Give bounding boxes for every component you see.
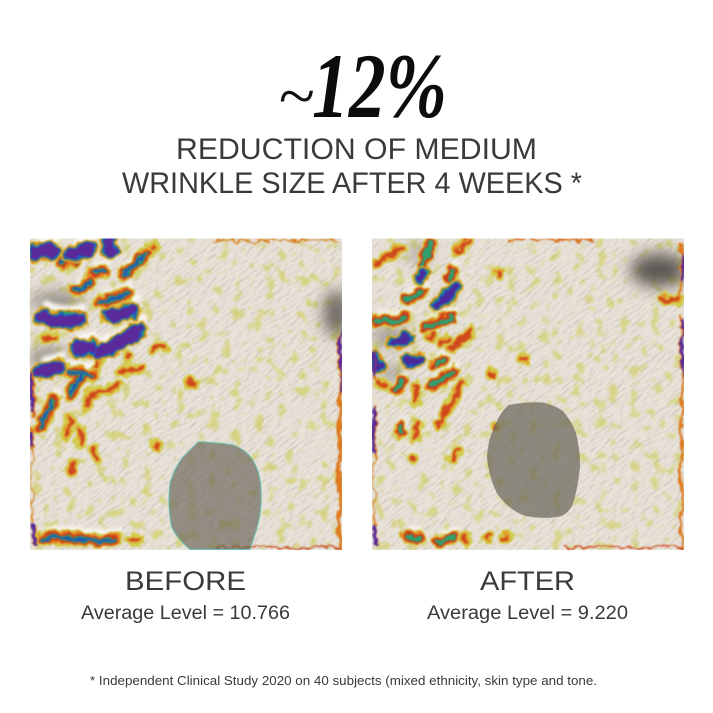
label: after: AFTER: [480, 566, 575, 596]
measurement area: [487, 402, 580, 518]
title: ~12% statistic: 12%: [312, 35, 447, 137]
panel: after wrinkle scan: [372, 238, 684, 550]
subtitle: REDUCTION OF MEDIUM: [176, 133, 537, 166]
subtitle: WRINKLE SIZE AFTER 4 WEEKS *: [122, 167, 582, 200]
texture: [30, 238, 342, 550]
highlight bands: [379, 234, 458, 534]
texture: [372, 238, 684, 550]
yellow blotches: [372, 238, 684, 550]
before average level: Average Level = 10.766: [81, 603, 290, 624]
after average level: Average Level = 9.220: [427, 603, 628, 624]
wrinkle heat map: [373, 239, 683, 547]
image edge bands: [32, 337, 340, 547]
measurement area: [169, 442, 261, 549]
footnote: * Independent Clinical Study 2020 on 40 subjects (mixed ethnicity, skin type and tone.: [90, 674, 597, 688]
title: ~12% statistic: ~: [278, 60, 314, 131]
yellow blotches: [30, 238, 342, 550]
label: before: BEFORE: [125, 566, 246, 596]
shadows: [372, 243, 687, 380]
title: ~12% statistic: [278, 35, 447, 137]
image edge bands: [374, 243, 681, 547]
subtitle: [122, 133, 582, 200]
wrinkle heat map: [31, 240, 341, 547]
panel: before wrinkle scan: [30, 238, 342, 550]
highlight bands: [40, 231, 149, 532]
shadows: [30, 290, 350, 367]
